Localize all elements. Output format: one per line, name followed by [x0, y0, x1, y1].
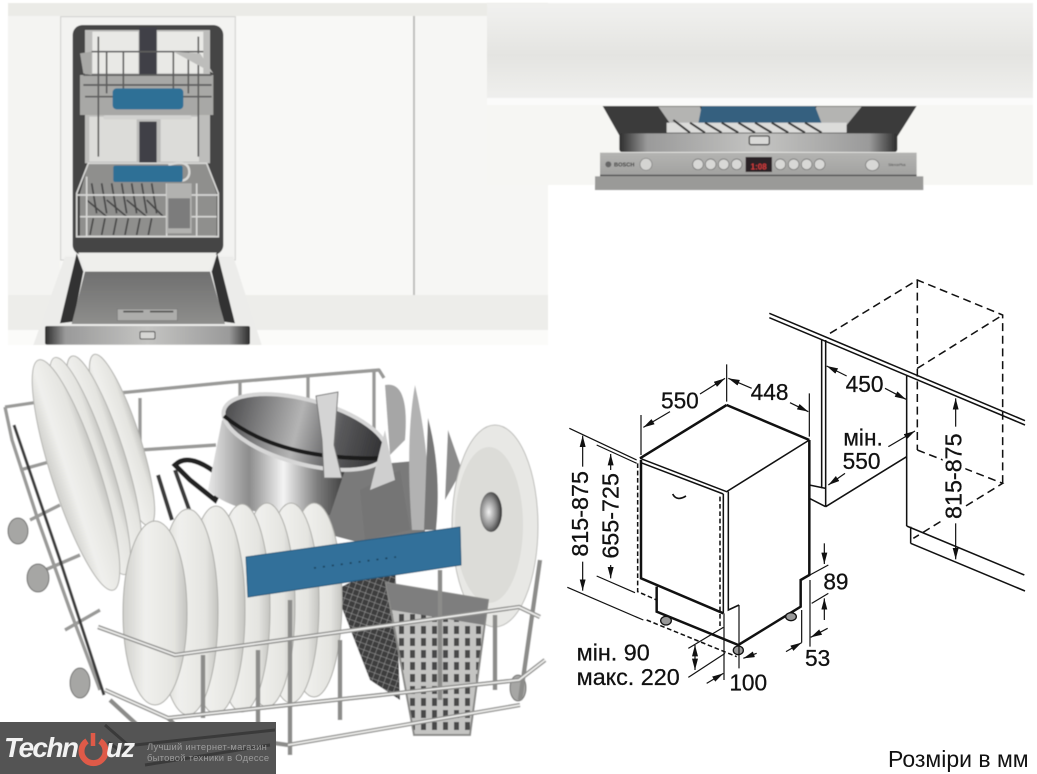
tagline: Лучший интернет-магазин	[147, 741, 267, 752]
logo wordmark: Techn	[4, 732, 78, 763]
photo: closed dishwasher with control panel	[487, 3, 1033, 190]
fork	[316, 392, 342, 478]
dimension labels: 815-875	[567, 471, 593, 557]
icon: blue upper rack handle	[113, 88, 183, 109]
dimension labels	[567, 371, 967, 696]
cutlery basket	[386, 583, 488, 735]
dimension labels: 550	[661, 387, 699, 413]
control panel: 1:08	[751, 162, 767, 171]
dimension labels: мін. 90	[577, 640, 650, 666]
dimension labels: 550	[843, 448, 880, 474]
photo: open built-in dishwasher in kitchen	[8, 3, 548, 345]
dimension labels: 815-875	[941, 433, 967, 519]
double arrow min 90	[693, 645, 697, 670]
display	[746, 157, 772, 172]
logo wordmark end: uz	[106, 733, 135, 763]
icon: red power button	[82, 733, 106, 763]
cabinet niche	[769, 313, 1025, 591]
front row of plates	[123, 503, 342, 715]
photo: dish rack with plates, pot and cutlery	[0, 349, 550, 774]
dimension arrows	[583, 366, 956, 683]
dimension labels: 450	[846, 371, 883, 397]
rollers	[8, 518, 526, 701]
adjustable feet	[661, 613, 796, 655]
dark mesh behind	[335, 560, 400, 700]
pot	[208, 379, 394, 516]
tagline second line: бытовой техники в Одессе	[147, 752, 269, 763]
dimension labels: 655-725	[597, 473, 623, 559]
appliance body	[638, 405, 809, 657]
caption: dimensions in mm: Розміри в мм	[888, 746, 1029, 772]
dimension labels: 53	[805, 645, 830, 671]
dashed niche outline	[830, 280, 1003, 538]
right plate	[452, 425, 538, 627]
back row of plates	[16, 349, 167, 597]
dimension labels: макс. 220	[577, 664, 680, 690]
blue handle	[246, 527, 461, 597]
front rack wires	[98, 560, 545, 755]
extension lines	[567, 364, 828, 680]
dimension labels: 448	[751, 379, 788, 405]
control panel: SilencePlus	[888, 163, 906, 167]
icon: blue lower rack handle	[113, 166, 183, 182]
label backing for right height	[943, 430, 965, 521]
technical dimension drawing	[567, 280, 1025, 696]
dimension labels: мін.	[843, 425, 883, 451]
icon: door handle	[749, 136, 769, 145]
dimension labels: 100	[729, 670, 767, 696]
rear rack wires	[5, 370, 384, 690]
dimension labels: 89	[823, 568, 849, 594]
control panel	[595, 153, 923, 190]
dark side rail	[14, 425, 104, 695]
cutlery	[360, 385, 462, 540]
brand: BOSCH: BOSCH	[614, 162, 634, 168]
logo band	[0, 722, 276, 774]
